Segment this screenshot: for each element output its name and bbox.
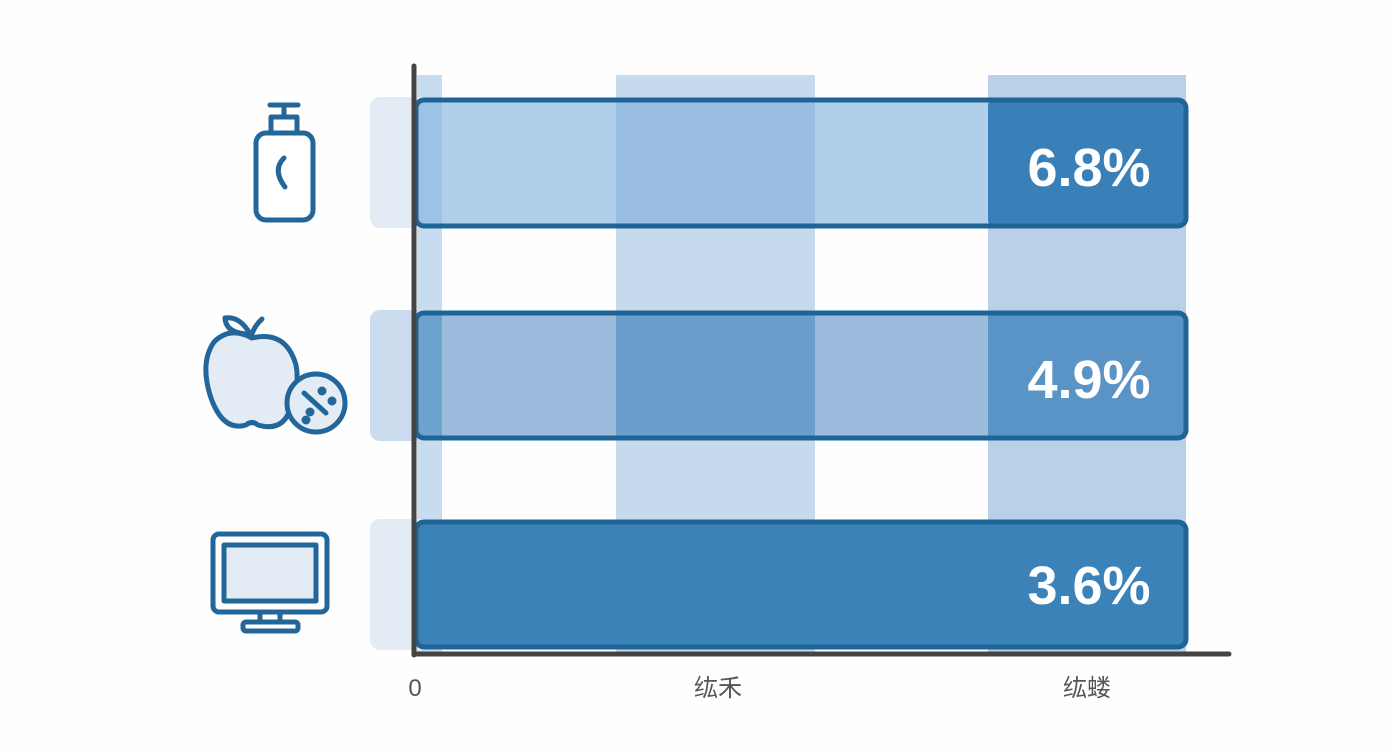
- axis labels: 纮蝼: [1063, 675, 1111, 702]
- icon: monitor: [213, 534, 327, 631]
- icon: apple with pill: [206, 318, 345, 432]
- axis labels: [408, 675, 1111, 702]
- bar 2: 4.9%: 4.9%: [1027, 350, 1151, 410]
- bar 2: 4.9%: [416, 313, 1186, 438]
- axes: [414, 66, 1229, 655]
- axis labels: 0: [408, 675, 422, 702]
- bar 3: 3.6%: 3.6%: [1027, 556, 1151, 616]
- axis labels: 纮禾: [694, 675, 742, 702]
- background columns: [417, 75, 1186, 653]
- icon: pump bottle: [256, 105, 313, 220]
- bar 1: 6.8%: 6.8%: [1027, 138, 1151, 198]
- bar 1: 6.8%: [416, 100, 1186, 226]
- bar 3: 3.6%: [416, 522, 1186, 647]
- row backgrounds: [370, 97, 430, 650]
